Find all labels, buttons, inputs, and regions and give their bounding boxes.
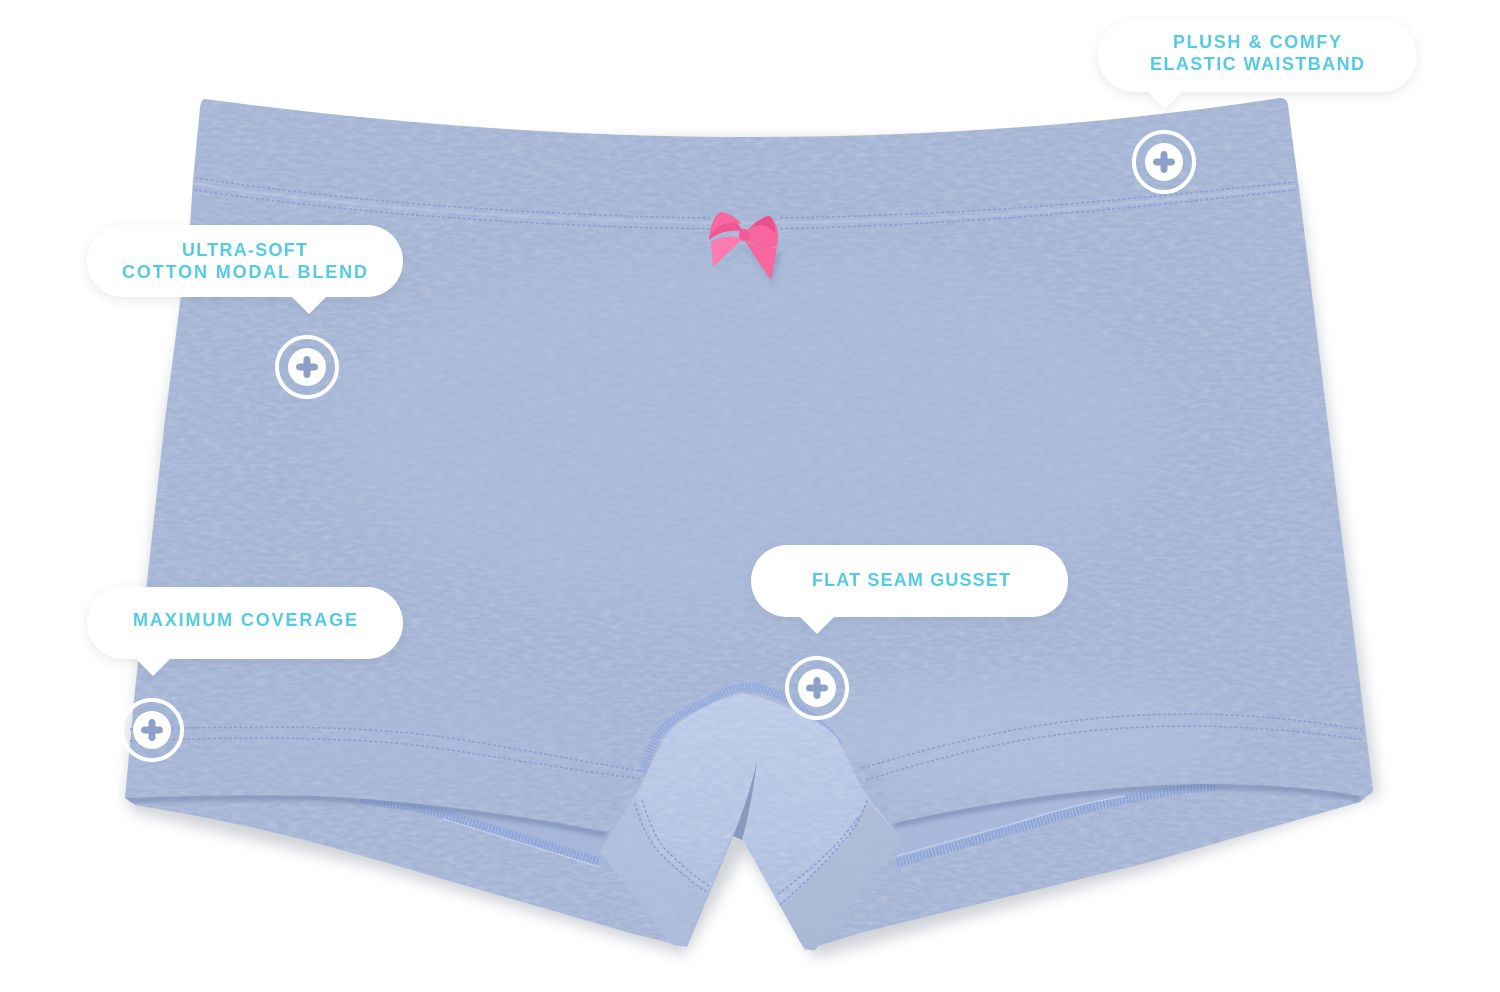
callout text: ULTRA-SOFT	[182, 240, 307, 260]
inner fabric and overlock seams	[360, 784, 1215, 867]
callout: maximum coverage	[87, 587, 403, 676]
bow cast shadow	[716, 245, 782, 284]
icon: pink bow	[709, 212, 782, 284]
callout: plush waistband	[1098, 20, 1417, 109]
back panel of the leg openings	[125, 700, 1373, 950]
callout: flat seam gusset	[751, 545, 1068, 634]
bow left loop	[709, 212, 744, 240]
callout bubble	[87, 225, 403, 314]
gusset fabric	[600, 693, 902, 950]
callout text	[122, 240, 367, 282]
bow knot	[739, 229, 749, 241]
icon: plus marker fabric	[277, 337, 337, 397]
callout text: COTTON MODAL BLEND	[122, 262, 367, 282]
left leg hem stitching	[130, 727, 640, 779]
gusset overlock seam	[643, 686, 840, 772]
callout text: FLAT SEAM GUSSET	[812, 570, 1010, 590]
garment drop shadow	[126, 140, 1379, 958]
callout bubble	[1098, 20, 1417, 109]
waistband stitching	[194, 178, 1296, 229]
bow right loop	[745, 216, 778, 248]
callout bubble	[87, 587, 403, 676]
icon: plus marker coverage	[122, 700, 182, 760]
callout text: ELASTIC WAISTBAND	[1150, 54, 1364, 74]
callout text: PLUSH & COMFY	[1173, 32, 1341, 52]
callout: ultra-soft blend	[87, 225, 403, 314]
gusset centre fold	[733, 760, 757, 840]
bow right tail	[744, 240, 777, 280]
callout text	[1150, 32, 1364, 74]
front panel body	[125, 98, 1373, 832]
right leg hem stitching	[862, 714, 1363, 780]
callout bubble	[751, 545, 1068, 634]
gusset right band tint	[782, 800, 902, 950]
callout text: MAXIMUM COVERAGE	[133, 610, 357, 630]
icon: plus marker gusset	[787, 658, 847, 718]
front panel shading	[220, 240, 1230, 800]
gusset left band tint	[600, 795, 708, 946]
bow left tail	[711, 236, 744, 267]
garment: boyshort underwear	[125, 98, 1373, 950]
icon: plus marker waistband	[1134, 132, 1194, 192]
gusset flap stitching	[635, 803, 708, 893]
gusset	[600, 686, 902, 950]
hem cast shadow on back panel	[125, 786, 1360, 834]
